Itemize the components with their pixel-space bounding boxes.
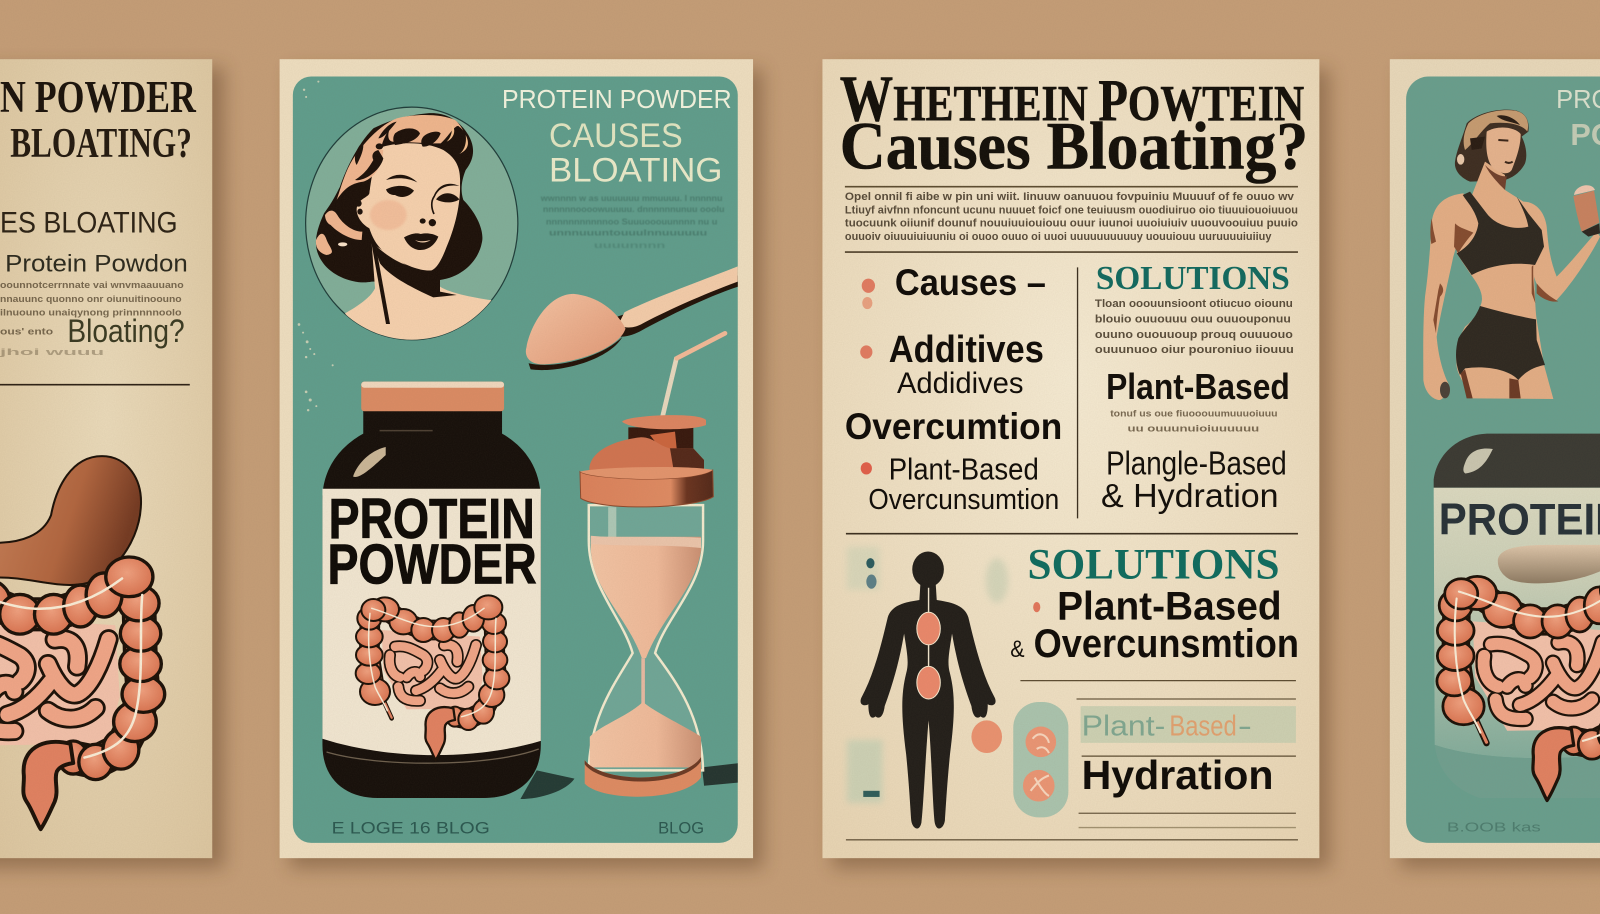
jar label (322, 489, 541, 755)
arm shadows (1430, 218, 1473, 333)
intro paragraph: Ltiuyf aivfnn nfoncunt ucunu nuuuet foicf one teuiuusm ouodiuiruo oio tiuuuiouoiuuou (845, 204, 1298, 216)
poster body text: nnnnnnnnnnnoo Suuuooouunnnn nu u (546, 217, 717, 226)
icon: intestines (0, 557, 165, 829)
shoulders and neck skin (345, 243, 494, 342)
hair highlight top (388, 115, 464, 144)
neck shadow (1485, 165, 1507, 190)
poster title: CAUSES (549, 117, 683, 155)
causes column: Causes – (895, 262, 1046, 303)
solutions column (1095, 260, 1294, 515)
leg shadows (1461, 369, 1521, 398)
solutions column: & Hydration (1101, 478, 1279, 515)
solutions paragraph: ouuno ououuoup prouq ouuuouo (1095, 329, 1293, 341)
plant-based banner (1081, 706, 1296, 743)
jar label text (328, 487, 537, 596)
neck line (371, 243, 390, 324)
teal background card (293, 77, 738, 843)
collar (580, 470, 713, 507)
left poster body text: ilnuouno unaiqynong prinnnnnoolo (0, 307, 182, 317)
poster footer: BLOG (658, 820, 704, 838)
dark curls left (354, 122, 397, 196)
straw (663, 357, 677, 416)
plant-based banner: Plant- (1082, 711, 1165, 743)
solutions column: Plangle-Based (1106, 445, 1287, 482)
lower sand (590, 702, 701, 767)
hair highlight left (337, 118, 397, 200)
icon: spoon of powder (526, 266, 738, 370)
causes column: Overcumtion (845, 406, 1062, 447)
face (1486, 127, 1521, 173)
faded decorations (847, 547, 1008, 803)
right poster footer: B.OOB kas (1447, 820, 1541, 835)
plant-based detail: tonuf us oue fiuooouumuuuoiuuu (1110, 408, 1278, 418)
solutions block: SOLUTIONS (1028, 541, 1280, 589)
solutions block: Overcunsmtion (1034, 622, 1299, 666)
left poster body text: oounnotcerrnnate vai wnvmaauuano (0, 280, 184, 290)
bullets (860, 279, 875, 474)
worn speckles (298, 81, 334, 411)
lips (404, 233, 438, 250)
panel: centre-left poster (280, 59, 763, 868)
left poster heading: N POWDER (0, 71, 197, 122)
dark bangs (393, 126, 467, 154)
dome (589, 437, 704, 478)
jar intestines (356, 595, 509, 760)
poster footer (332, 820, 704, 838)
main title (840, 63, 1308, 183)
jar label text: POWDER (328, 533, 537, 596)
falling sand (641, 658, 645, 705)
glass reflection (608, 507, 616, 538)
solutions block: Plant-Based (1057, 584, 1282, 628)
cheek blush (370, 200, 407, 230)
solutions block (1010, 541, 1299, 666)
solutions paragraph: blouio ouuouuu ouu ouuouponuu (1095, 313, 1291, 325)
poster title (502, 86, 732, 190)
panel: left poster (0, 59, 224, 868)
jar shadow (520, 770, 574, 799)
left arm (1423, 193, 1480, 400)
causes column: Plant-Based (889, 453, 1039, 487)
plant-based detail (1110, 408, 1278, 434)
shaker (1573, 191, 1599, 232)
main title: Causes Bloating? (840, 108, 1308, 183)
sports top (1457, 192, 1544, 275)
facial features (1498, 140, 1513, 163)
left eyebrow (386, 175, 417, 182)
shaker top (580, 333, 725, 507)
hydration label: Hydration (1082, 752, 1273, 798)
causes column: Additives (889, 328, 1044, 370)
hair highlight strand (447, 124, 468, 154)
hourglass base (585, 757, 701, 797)
disc (622, 415, 706, 429)
plant-based banner: Based (1169, 711, 1237, 743)
right poster title (1556, 86, 1600, 152)
plant-based detail: uu ouuunuioiuuuuuu (1128, 424, 1259, 434)
face (357, 143, 460, 271)
causes column (845, 262, 1062, 516)
poster title: BLOATING (549, 152, 722, 190)
poster body text: unnnuuuntouuulnnuuuuuu (549, 229, 707, 238)
main title: WHETHEIN POWTEIN (840, 63, 1304, 135)
left poster subtitle: Protein Powdon (5, 250, 188, 277)
left poster heading: BLOATING? (10, 121, 192, 167)
poster body text: wwnnnn w as uuuuuuu mmuuuu. I nnnnnu (540, 194, 722, 203)
poster body text (540, 194, 725, 250)
left poster body text: ous' ento (0, 327, 54, 337)
nostrils (420, 218, 426, 224)
poster body text: uuuunnnn (594, 241, 665, 250)
fitness woman figure (1423, 110, 1600, 400)
hair (1455, 110, 1529, 182)
jaw shadow (373, 243, 457, 297)
intro paragraph: tuocuunk oiiunif dounuf nouuiuuiouiouu ouur iuunoi uuoiuiuiv uuouvoouiuu puuio (845, 218, 1298, 230)
left poster body text (0, 280, 184, 357)
panel: centre-right poster (822, 59, 1330, 868)
left poster heading (0, 71, 197, 167)
jar label text: PROTEIN (329, 487, 535, 550)
poster body text: nnnnnnoooowuuuuu. dnnnnnnunuu ooolu (543, 205, 725, 214)
poster title: PROTEIN POWDER (502, 86, 732, 114)
left poster question: Bloating? (67, 312, 185, 349)
ear curl (357, 201, 363, 215)
solutions block: & (1010, 636, 1024, 663)
hourglass glass (589, 505, 703, 770)
pill icon panel (1013, 702, 1068, 817)
solutions paragraph: ouuunuoo oiur pouroniuo iiouuu (1095, 344, 1294, 356)
icon: protein jar (322, 382, 574, 799)
right eye (436, 193, 459, 202)
jar body (322, 410, 541, 798)
solutions column: Plant-Based (1106, 367, 1290, 407)
left poster body text: jhoi wuuu (0, 347, 104, 357)
panel: right poster (1390, 59, 1600, 868)
left poster subheading: ES BLOATING (0, 207, 178, 240)
icon: human body (861, 552, 996, 829)
icon: hourglass shaker (580, 333, 738, 797)
solutions paragraph: Tloan ooouunsioont otiucuo oiounu (1095, 298, 1293, 310)
nose line (432, 197, 434, 214)
hair mass (316, 113, 482, 282)
left poster body text: nnauunc quonno onr oiunuitinoouno (0, 294, 182, 304)
intro paragraph (845, 191, 1298, 243)
right eyebrow (433, 184, 460, 198)
poster footer: E LOGE 16 BLOG (332, 820, 490, 838)
shorts (1456, 306, 1545, 380)
intro paragraph: Opel onnil fi aibe w pin uni wiit. Iinuuw oanuuou fovpuiniu Muuuuf of fe ouuo wv (845, 191, 1294, 203)
portrait: retro woman (306, 107, 518, 342)
icon: detached organ (971, 720, 1002, 753)
solutions paragraph (1095, 298, 1294, 356)
lower curl (316, 211, 362, 255)
blurred jar (1434, 434, 1600, 801)
causes column: Addidives (897, 367, 1023, 400)
causes column: Overcunsumtion (868, 484, 1059, 516)
icon: stomach (0, 456, 141, 585)
jar highlight (353, 447, 386, 477)
jar intestines (1437, 574, 1600, 801)
upper sand (591, 537, 701, 658)
intro paragraph: ouuoiv oiuuuiuiuuniu oi ouoo ouuo oi uuoi uuuuuuuuuuy uouuiouu uuruuuuiuiiuy (845, 231, 1271, 243)
cylinder (628, 427, 693, 454)
left eye (386, 186, 414, 197)
torso and legs (1456, 162, 1600, 399)
held object (1440, 382, 1450, 398)
plant-based banner: - (1238, 711, 1252, 743)
jar lid (361, 382, 504, 411)
solutions column: SOLUTIONS (1096, 260, 1290, 297)
hourglass shadow (702, 763, 738, 786)
